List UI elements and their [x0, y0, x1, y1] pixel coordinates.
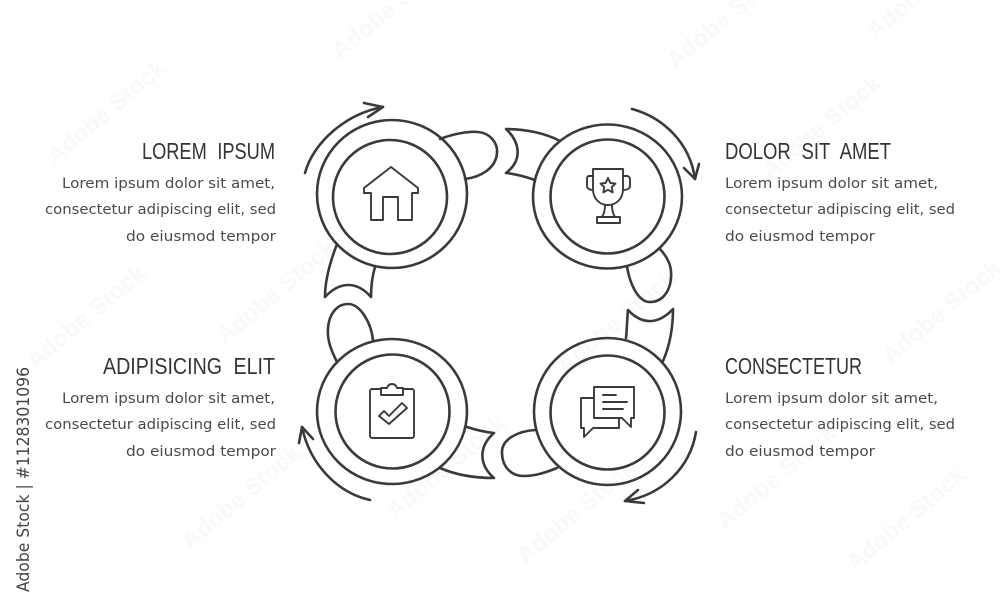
- heading: consectetur: CONSECTETUR: [725, 353, 862, 379]
- outer ring: step 3: [317, 339, 467, 484]
- icon: trophy: [587, 169, 630, 223]
- panel: step 4 consectetur: [502, 309, 955, 503]
- text block: step 1: Lorem ipsum dolor sit amet,: [62, 176, 275, 192]
- icon: clipboard: [370, 384, 414, 438]
- text block: step 3: Lorem ipsum dolor sit amet,: [62, 391, 275, 407]
- text block: step 4: [725, 391, 955, 460]
- heading: lorem ipsum: LOREM IPSUM: [142, 138, 275, 164]
- text block: step 1: consectetur adipiscing elit, sed: [45, 202, 276, 218]
- arrow: step 4: [625, 432, 696, 503]
- text block: step 3: [45, 391, 276, 460]
- heading: adipisicing elit: ADIPISICING ELIT: [103, 353, 275, 379]
- text block: step 2: consectetur adipiscing elit, sed: [725, 202, 955, 218]
- panel: step 2 dolor sit amet: [506, 109, 955, 302]
- text block: step 3: do eiusmod tempor: [126, 444, 276, 460]
- watermark pattern: Adobe Stock: [512, 454, 642, 570]
- stock credit text: Adobe Stock | #1128301096: [14, 367, 34, 592]
- watermark pattern: Adobe Stock: [22, 259, 152, 375]
- text block: step 4: do eiusmod tempor: [725, 444, 875, 460]
- text block: step 4: Lorem ipsum dolor sit amet,: [725, 391, 938, 407]
- outer ring: step 1: [317, 120, 467, 268]
- lobe: step 2: [627, 249, 671, 302]
- inner ring: step 1: [333, 140, 447, 254]
- watermark pattern: Adobe Stock: [552, 264, 682, 380]
- watermark pattern: Adobe Stock: [177, 439, 307, 555]
- arrow: step 3: [299, 427, 370, 500]
- heading: dolor sit amet: DOLOR SIT AMET: [725, 138, 891, 164]
- panel: step 3 adipisicing elit: [45, 304, 494, 500]
- text block: step 2: Lorem ipsum dolor sit amet,: [725, 176, 938, 192]
- inner ring: step 3: [336, 354, 450, 468]
- outer ring: step 4: [534, 338, 681, 485]
- arrow: step 2: [632, 109, 699, 179]
- icon: speech bubbles: [581, 387, 634, 437]
- panel: step 1 lorem ipsum: [45, 103, 497, 297]
- text block: step 1: do eiusmod tempor: [126, 229, 276, 245]
- icon: house: [364, 167, 418, 220]
- text block: step 1: [45, 176, 276, 245]
- watermark pattern: Adobe Stock: [42, 54, 172, 170]
- ribbon: step 2: [506, 129, 560, 180]
- lobe: step 1: [440, 132, 497, 179]
- arrow: step 1: [305, 103, 383, 173]
- watermark pattern: Adobe Stock: [757, 69, 887, 185]
- ribbon: step 4: [626, 309, 673, 361]
- ribbon: step 1: [325, 244, 375, 297]
- watermark pattern: Adobe Stock: [712, 419, 842, 535]
- watermark pattern: Adobe Stock: [212, 234, 342, 350]
- inner ring: step 2: [550, 140, 664, 254]
- lobe: step 4: [502, 430, 557, 476]
- text block: step 3: consectetur adipiscing elit, sed: [45, 417, 276, 433]
- inner ring: step 4: [550, 356, 664, 470]
- text block: step 4: consectetur adipiscing elit, sed: [725, 417, 955, 433]
- text block: step 2: [725, 176, 955, 245]
- watermark pattern: Adobe Stock: [382, 409, 512, 525]
- text block: step 2: do eiusmod tempor: [725, 229, 875, 245]
- outer ring: step 2: [533, 124, 682, 268]
- lobe: step 3: [328, 304, 373, 362]
- ribbon: step 3: [440, 427, 494, 478]
- watermark pattern: Adobe Stock: [842, 461, 972, 577]
